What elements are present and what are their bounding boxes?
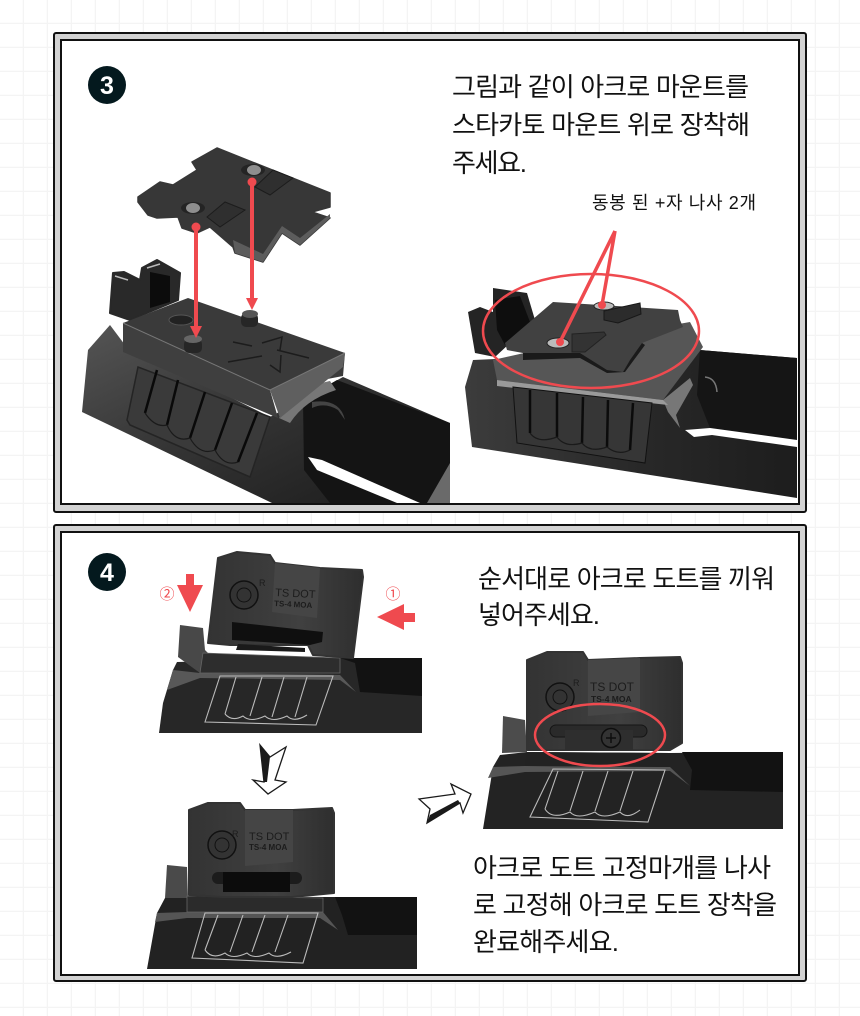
seated optic xyxy=(189,803,334,897)
label: dowel screws: 동봉 된 +자 나사 2개 xyxy=(592,193,756,213)
instruction text: insert optic xyxy=(478,564,775,630)
screws on base xyxy=(184,310,258,353)
step number 4 xyxy=(88,553,126,591)
step number 4: 4 xyxy=(100,559,114,587)
installed plate xyxy=(505,302,683,373)
instruction text: insert optic: 넣어주세요. xyxy=(478,600,600,630)
rear sight xyxy=(110,260,180,320)
illustration: slide with mount plate above xyxy=(82,148,450,503)
rear sight xyxy=(468,288,535,357)
barrel xyxy=(279,380,450,503)
instruction text: fix with screw: 로 고정해 아크로 도트 장착을 xyxy=(473,890,777,920)
star logo xyxy=(228,337,309,372)
step number 3: 3 xyxy=(100,72,114,100)
slide body left xyxy=(82,325,450,503)
hollow arrow: down xyxy=(253,745,286,794)
tilted optic xyxy=(208,552,363,658)
serrations xyxy=(513,387,652,463)
instruction text: insert optic: 순서대로 아크로 도트를 끼워 xyxy=(478,564,775,594)
red arrow 2 and label xyxy=(159,574,203,612)
hollow arrow: right xyxy=(419,784,471,823)
panel: step 4 xyxy=(54,525,806,981)
red arrows down to screws xyxy=(190,178,258,338)
mount base xyxy=(493,322,703,405)
instruction text: step 3: 주세요. xyxy=(452,148,527,178)
instruction text: fix with screw: 완료해주세요. xyxy=(473,927,619,957)
seated optic: TS DOT xyxy=(249,831,290,843)
tilted optic: R xyxy=(259,578,266,588)
red arrow 2 and label: ② xyxy=(159,586,175,603)
illustration: optic seated, open xyxy=(147,803,417,969)
mount base xyxy=(123,298,345,418)
instruction text: fix with screw: 아크로 도트 고정마개를 나사 xyxy=(473,853,771,883)
instruction text: step 3: 스타카토 마운트 위로 장착해 xyxy=(452,110,750,140)
seated optic: R xyxy=(232,829,239,839)
fixed optic: TS-4 MOA xyxy=(591,694,632,704)
step number 3 xyxy=(88,66,126,104)
callout: red ellipse around fixing cap xyxy=(535,704,665,766)
barrel and port xyxy=(663,350,797,447)
floating mount plate xyxy=(138,148,330,262)
tilted optic: TS DOT xyxy=(275,587,316,601)
callout: red ellipse and pointer lines xyxy=(483,231,699,388)
seated optic: TS-4 MOA xyxy=(249,843,287,852)
fixed optic xyxy=(527,652,682,750)
instruction text: step 3: 그림과 같이 아크로 마운트를 xyxy=(452,72,749,102)
illustration: mount plate installed xyxy=(465,288,797,498)
red arrow 1 and label xyxy=(377,586,415,630)
red arrow 1 and label: ① xyxy=(385,586,401,603)
fixed optic: R xyxy=(573,678,580,688)
slide body right xyxy=(465,350,797,498)
instruction text: step 3 xyxy=(452,72,750,178)
illustration: optic fixed with screw xyxy=(483,652,783,829)
instruction text: fix with screw xyxy=(473,853,777,957)
illustration: optic tilted on slide xyxy=(159,552,422,733)
fixed optic: TS DOT xyxy=(590,680,635,694)
panel: step 3 xyxy=(54,33,806,512)
tilted optic: TS-4 MOA xyxy=(274,599,313,610)
serrations xyxy=(127,367,270,477)
